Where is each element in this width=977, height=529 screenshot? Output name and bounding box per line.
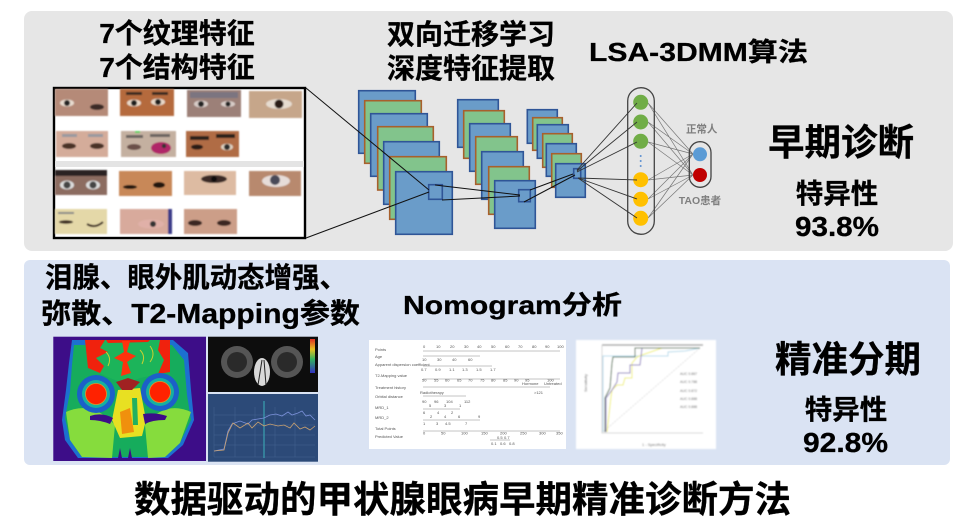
nomogram chart: 0.6 <box>500 441 506 446</box>
nomogram chart: 96 <box>434 399 439 404</box>
specificity 92.8% <box>803 394 888 458</box>
heading: texture and structure features <box>99 18 255 83</box>
nomogram chart: 20 <box>450 344 455 349</box>
nomogram chart: 100 <box>557 344 564 349</box>
ROC chart: Sensitivity <box>583 374 588 392</box>
nomogram chart: 2 <box>430 414 433 419</box>
nomogram chart: 50 <box>491 344 496 349</box>
nomogram chart: 1 <box>459 403 462 408</box>
nomogram chart: 30 <box>437 357 442 362</box>
ROC chart: AUC 0.888 <box>680 405 697 409</box>
nomogram chart: 80 <box>491 378 496 382</box>
convolutional stack 3 <box>527 110 585 197</box>
nomogram chart: Total Points <box>375 426 396 431</box>
nomogram chart: MRD_2 <box>375 415 389 420</box>
nomogram chart: Apparent dispersion coefficient <box>375 362 431 367</box>
nomogram chart: 4 <box>444 414 447 419</box>
heading: MRI parameters <box>41 262 360 329</box>
eye photo 7 <box>186 131 239 157</box>
nomogram chart: 60 <box>505 344 510 349</box>
eye photo 10 <box>184 171 236 195</box>
eye photo 12 <box>55 209 107 234</box>
specificity 93.8%: 特异性 <box>796 178 878 209</box>
nomogram chart: 90 <box>545 344 550 349</box>
nomogram chart: 1.3 <box>462 367 468 372</box>
nomogram chart: 50 <box>422 378 427 382</box>
heading: nomogram analysis: Nomogram分析 <box>403 290 622 320</box>
heading: precise staging: 精准分期 <box>775 339 921 380</box>
nomogram chart: Predicted Value <box>375 434 404 439</box>
orbit MRI scan <box>208 337 318 392</box>
output label: TAO patient: TAO患者 <box>679 194 721 207</box>
nomogram chart: 3 <box>436 421 439 426</box>
nomogram chart: T2-Mapping value <box>375 373 408 378</box>
nomogram chart: 0 <box>423 430 426 436</box>
nomogram chart: 0.5 <box>497 435 503 440</box>
nomogram chart: 60 <box>468 357 473 362</box>
connector lines: photos to network <box>306 88 575 238</box>
ROC chart: AUC 0.867 <box>680 372 697 376</box>
heading: early diagnosis: 早期诊断 <box>768 122 914 163</box>
heading: texture and structure features: 7个纹理特征 <box>99 18 255 49</box>
nomogram chart: 0.7 <box>421 367 427 372</box>
nomogram chart: 80 <box>532 344 537 349</box>
dynamic enhancement curve <box>208 394 318 462</box>
receptive field squares <box>429 169 581 202</box>
nomogram chart: Orbital distance <box>375 394 404 399</box>
heading: transfer learning: 深度特征提取 <box>387 53 555 84</box>
nomogram chart: 10 <box>422 357 427 362</box>
specificity 92.8%: 92.8% <box>803 427 888 458</box>
eye photo 1 <box>55 89 108 116</box>
nomogram chart: Treatment history <box>375 385 406 390</box>
eye photo 4 <box>249 91 302 118</box>
ROC chart: AUC 0.872 <box>680 389 697 393</box>
ROC chart: AUC 0.888 <box>680 397 697 401</box>
nomogram chart: MRD_1 <box>375 405 389 410</box>
main title: 数据驱动的甲状腺眼病早期精准诊断方法 <box>134 479 791 520</box>
ROC chart: AUC 0.788 <box>680 380 697 384</box>
nomogram chart: 90 <box>422 399 427 404</box>
nomogram chart: 250 <box>520 430 527 436</box>
eye photo 11 <box>249 171 301 196</box>
nomogram chart: 0.9 <box>435 367 441 372</box>
hidden layer capsule <box>628 88 654 234</box>
nomogram chart: 65 <box>457 378 462 382</box>
nomogram chart: 112 <box>464 399 471 404</box>
nomogram chart: 350 <box>556 430 563 436</box>
nomogram chart: 10 <box>436 344 441 349</box>
nomogram chart: 9 <box>478 414 481 419</box>
nomogram chart: 70 <box>518 344 523 349</box>
specificity 93.8%: 93.8% <box>795 211 879 242</box>
connector lines: feature map to nodes <box>577 103 637 218</box>
fully connected lines <box>648 103 693 218</box>
nomogram chart: 60 <box>445 378 450 382</box>
convolutional stack 2 <box>458 100 535 228</box>
nomogram chart: 7 <box>465 421 468 426</box>
nomogram chart: 300 <box>539 430 546 436</box>
nomogram chart: Radiotherapy <box>420 390 444 395</box>
nomogram chart: 95 <box>525 378 530 382</box>
nomogram chart: 6 <box>423 410 426 415</box>
eye photo 5 <box>56 131 108 157</box>
nomogram chart: Untreated <box>544 381 562 386</box>
nomogram chart: 100 <box>461 430 468 436</box>
eye photo 2 <box>120 89 174 116</box>
nomogram chart: 3 <box>444 403 447 408</box>
nomogram chart: 4.5 <box>445 421 451 426</box>
nomogram chart: 0.7 <box>504 435 510 440</box>
specificity 93.8% <box>795 178 879 242</box>
eye photo 9 <box>119 171 172 196</box>
nomogram chart: 4 <box>437 410 440 415</box>
nomogram chart: 0.8 <box>509 441 515 446</box>
nomogram chart <box>369 340 566 449</box>
nomogram chart: 200 <box>500 430 507 436</box>
nomogram chart: 85 <box>503 378 508 382</box>
panel: early diagnosis <box>24 11 953 251</box>
nomogram chart: 150 <box>481 430 488 436</box>
nomogram chart: 75 <box>480 378 485 382</box>
eye photo panel <box>54 88 305 238</box>
ROC chart <box>576 340 716 449</box>
nomogram chart: 104 <box>446 399 453 404</box>
convolutional stack 1 <box>359 91 452 234</box>
nomogram chart: 40 <box>452 357 457 362</box>
nomogram chart: 0.1 <box>491 441 497 446</box>
nomogram chart: 5 <box>429 403 432 408</box>
panel: precise staging <box>24 260 950 465</box>
heading: LSA-3DMM algorithm: LSA-3DMM算法 <box>589 37 808 67</box>
output label: normal: 正常人 <box>686 122 718 136</box>
eye photo 8 <box>55 170 107 195</box>
nomogram chart: 1 <box>423 421 426 426</box>
ROC chart: 1 - Specificity <box>642 442 666 447</box>
nomogram chart: 6 <box>458 414 461 419</box>
nomogram chart: 1.1 <box>449 367 455 372</box>
nomogram chart: 100 <box>547 378 554 382</box>
eye photo 14 <box>184 209 237 234</box>
nomogram chart: 70 <box>468 378 473 382</box>
nomogram chart: 2 <box>451 410 454 415</box>
nomogram chart: 40 <box>477 344 482 349</box>
heading: MRI parameters: 弥散、T2-Mapping参数 <box>41 298 360 329</box>
eye photo 3 <box>187 90 241 117</box>
eye photo 6 <box>121 131 176 157</box>
nomogram chart: Age <box>375 354 383 359</box>
heading: transfer learning <box>387 19 555 84</box>
nomogram chart: 0 <box>423 344 426 349</box>
nomogram chart: 55 <box>434 378 439 382</box>
nomogram chart: 50 <box>441 430 446 436</box>
MRI heat map <box>53 337 206 461</box>
nomogram chart: >121 <box>534 390 544 395</box>
specificity 92.8%: 特异性 <box>805 394 887 425</box>
nomogram chart: 30 <box>464 344 469 349</box>
nomogram chart: Points <box>375 347 386 352</box>
eye photo 13 <box>120 209 172 234</box>
heading: transfer learning: 双向迁移学习 <box>387 19 555 50</box>
nomogram chart: 90 <box>514 378 519 382</box>
nomogram chart: 1.7 <box>490 367 496 372</box>
heading: MRI parameters: 泪腺、眼外肌动态增强、 <box>45 262 347 293</box>
output layer capsule <box>689 142 711 187</box>
heading: texture and structure features: 7个结构特征 <box>99 52 255 83</box>
nomogram chart: 1.5 <box>476 367 482 372</box>
nomogram chart: Hormone <box>522 381 539 386</box>
